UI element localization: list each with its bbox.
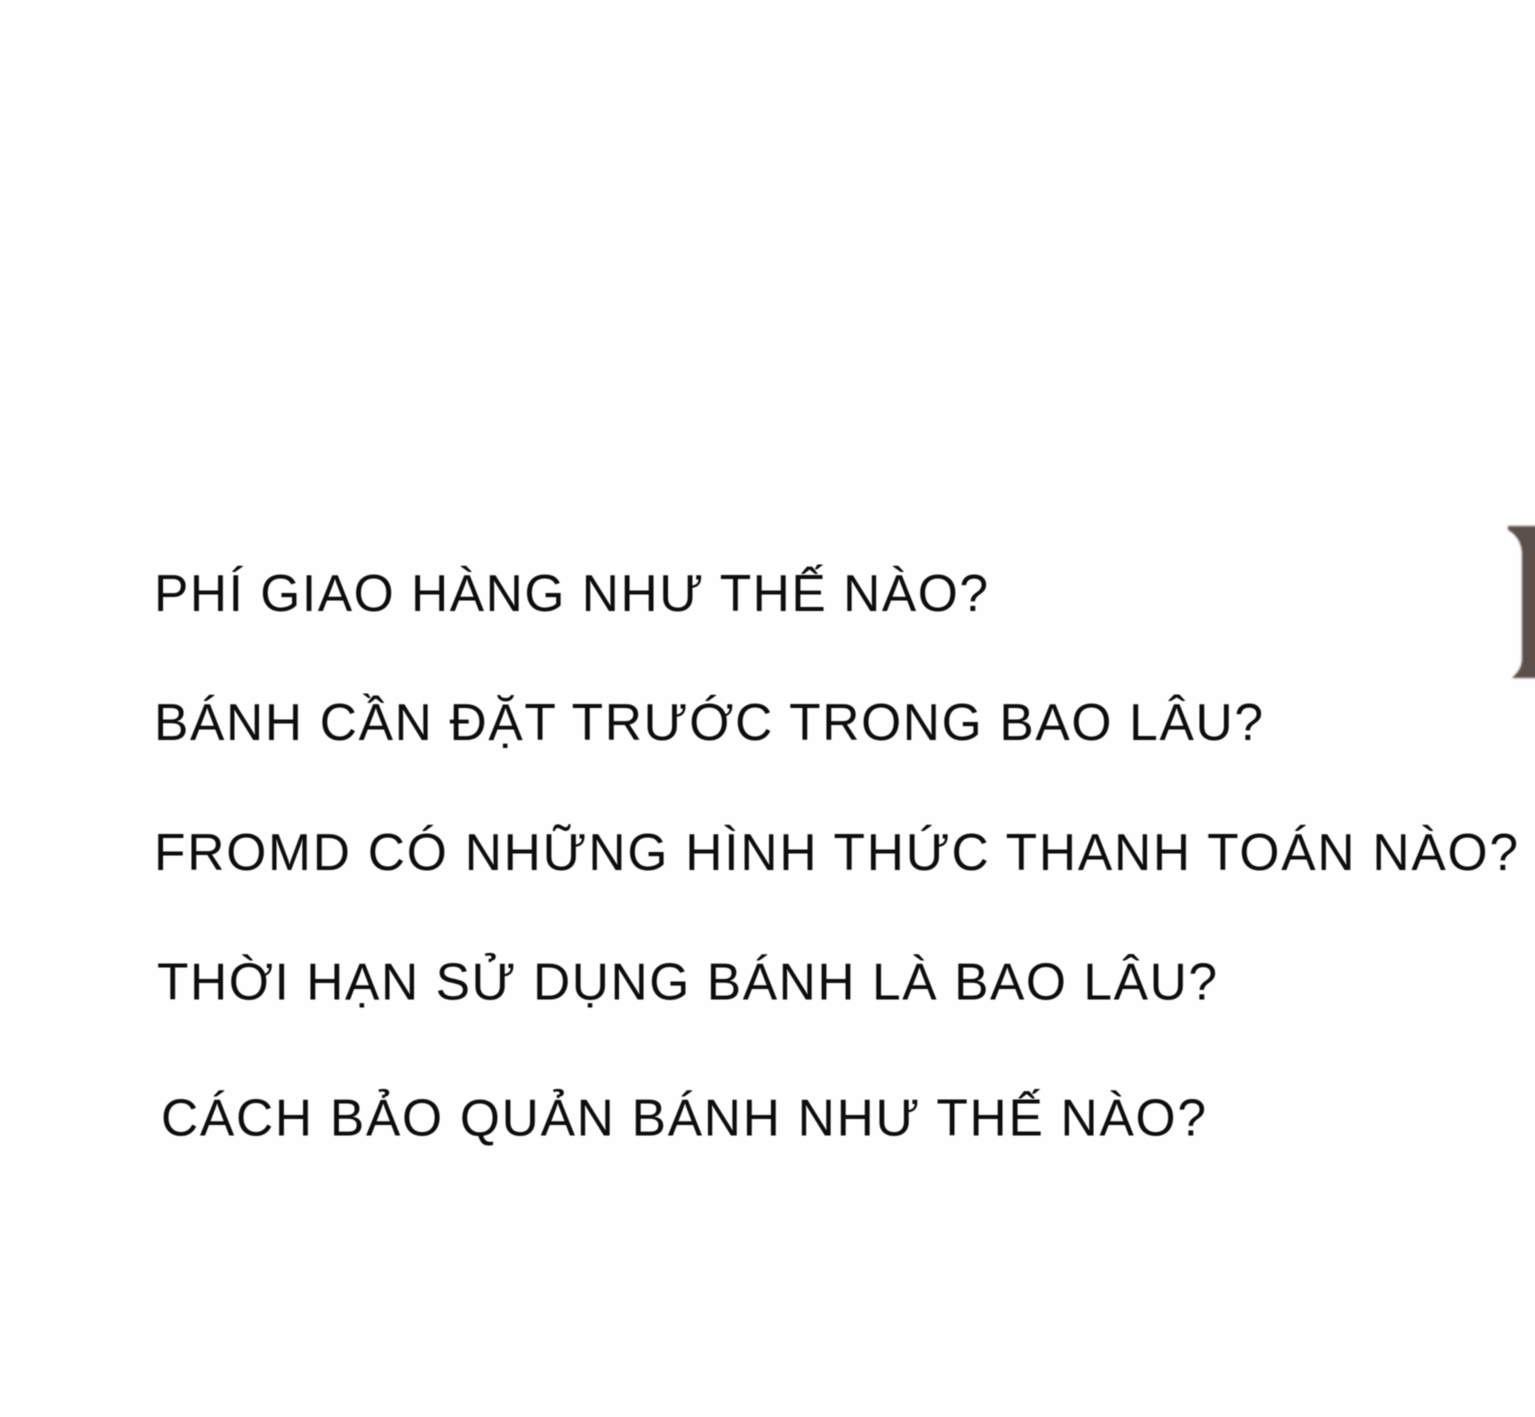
question 5: CÁCH BẢO QUẢN BÁNH NHƯ THẾ NÀO? <box>161 1088 1206 1146</box>
cropped serif letter at right edge <box>1508 526 1535 678</box>
question 3: FROMD CÓ NHỮNG HÌNH THỨC THANH TOÁN NÀO? <box>154 823 1518 881</box>
question 4: THỜI HẠN SỬ DỤNG BÁNH LÀ BAO LÂU? <box>157 952 1217 1010</box>
question 1: PHÍ GIAO HÀNG NHƯ THẾ NÀO? <box>154 564 988 622</box>
question list <box>154 564 1518 1146</box>
question 2: BÁNH CẦN ĐẶT TRƯỚC TRONG BAO LÂU? <box>154 693 1263 751</box>
